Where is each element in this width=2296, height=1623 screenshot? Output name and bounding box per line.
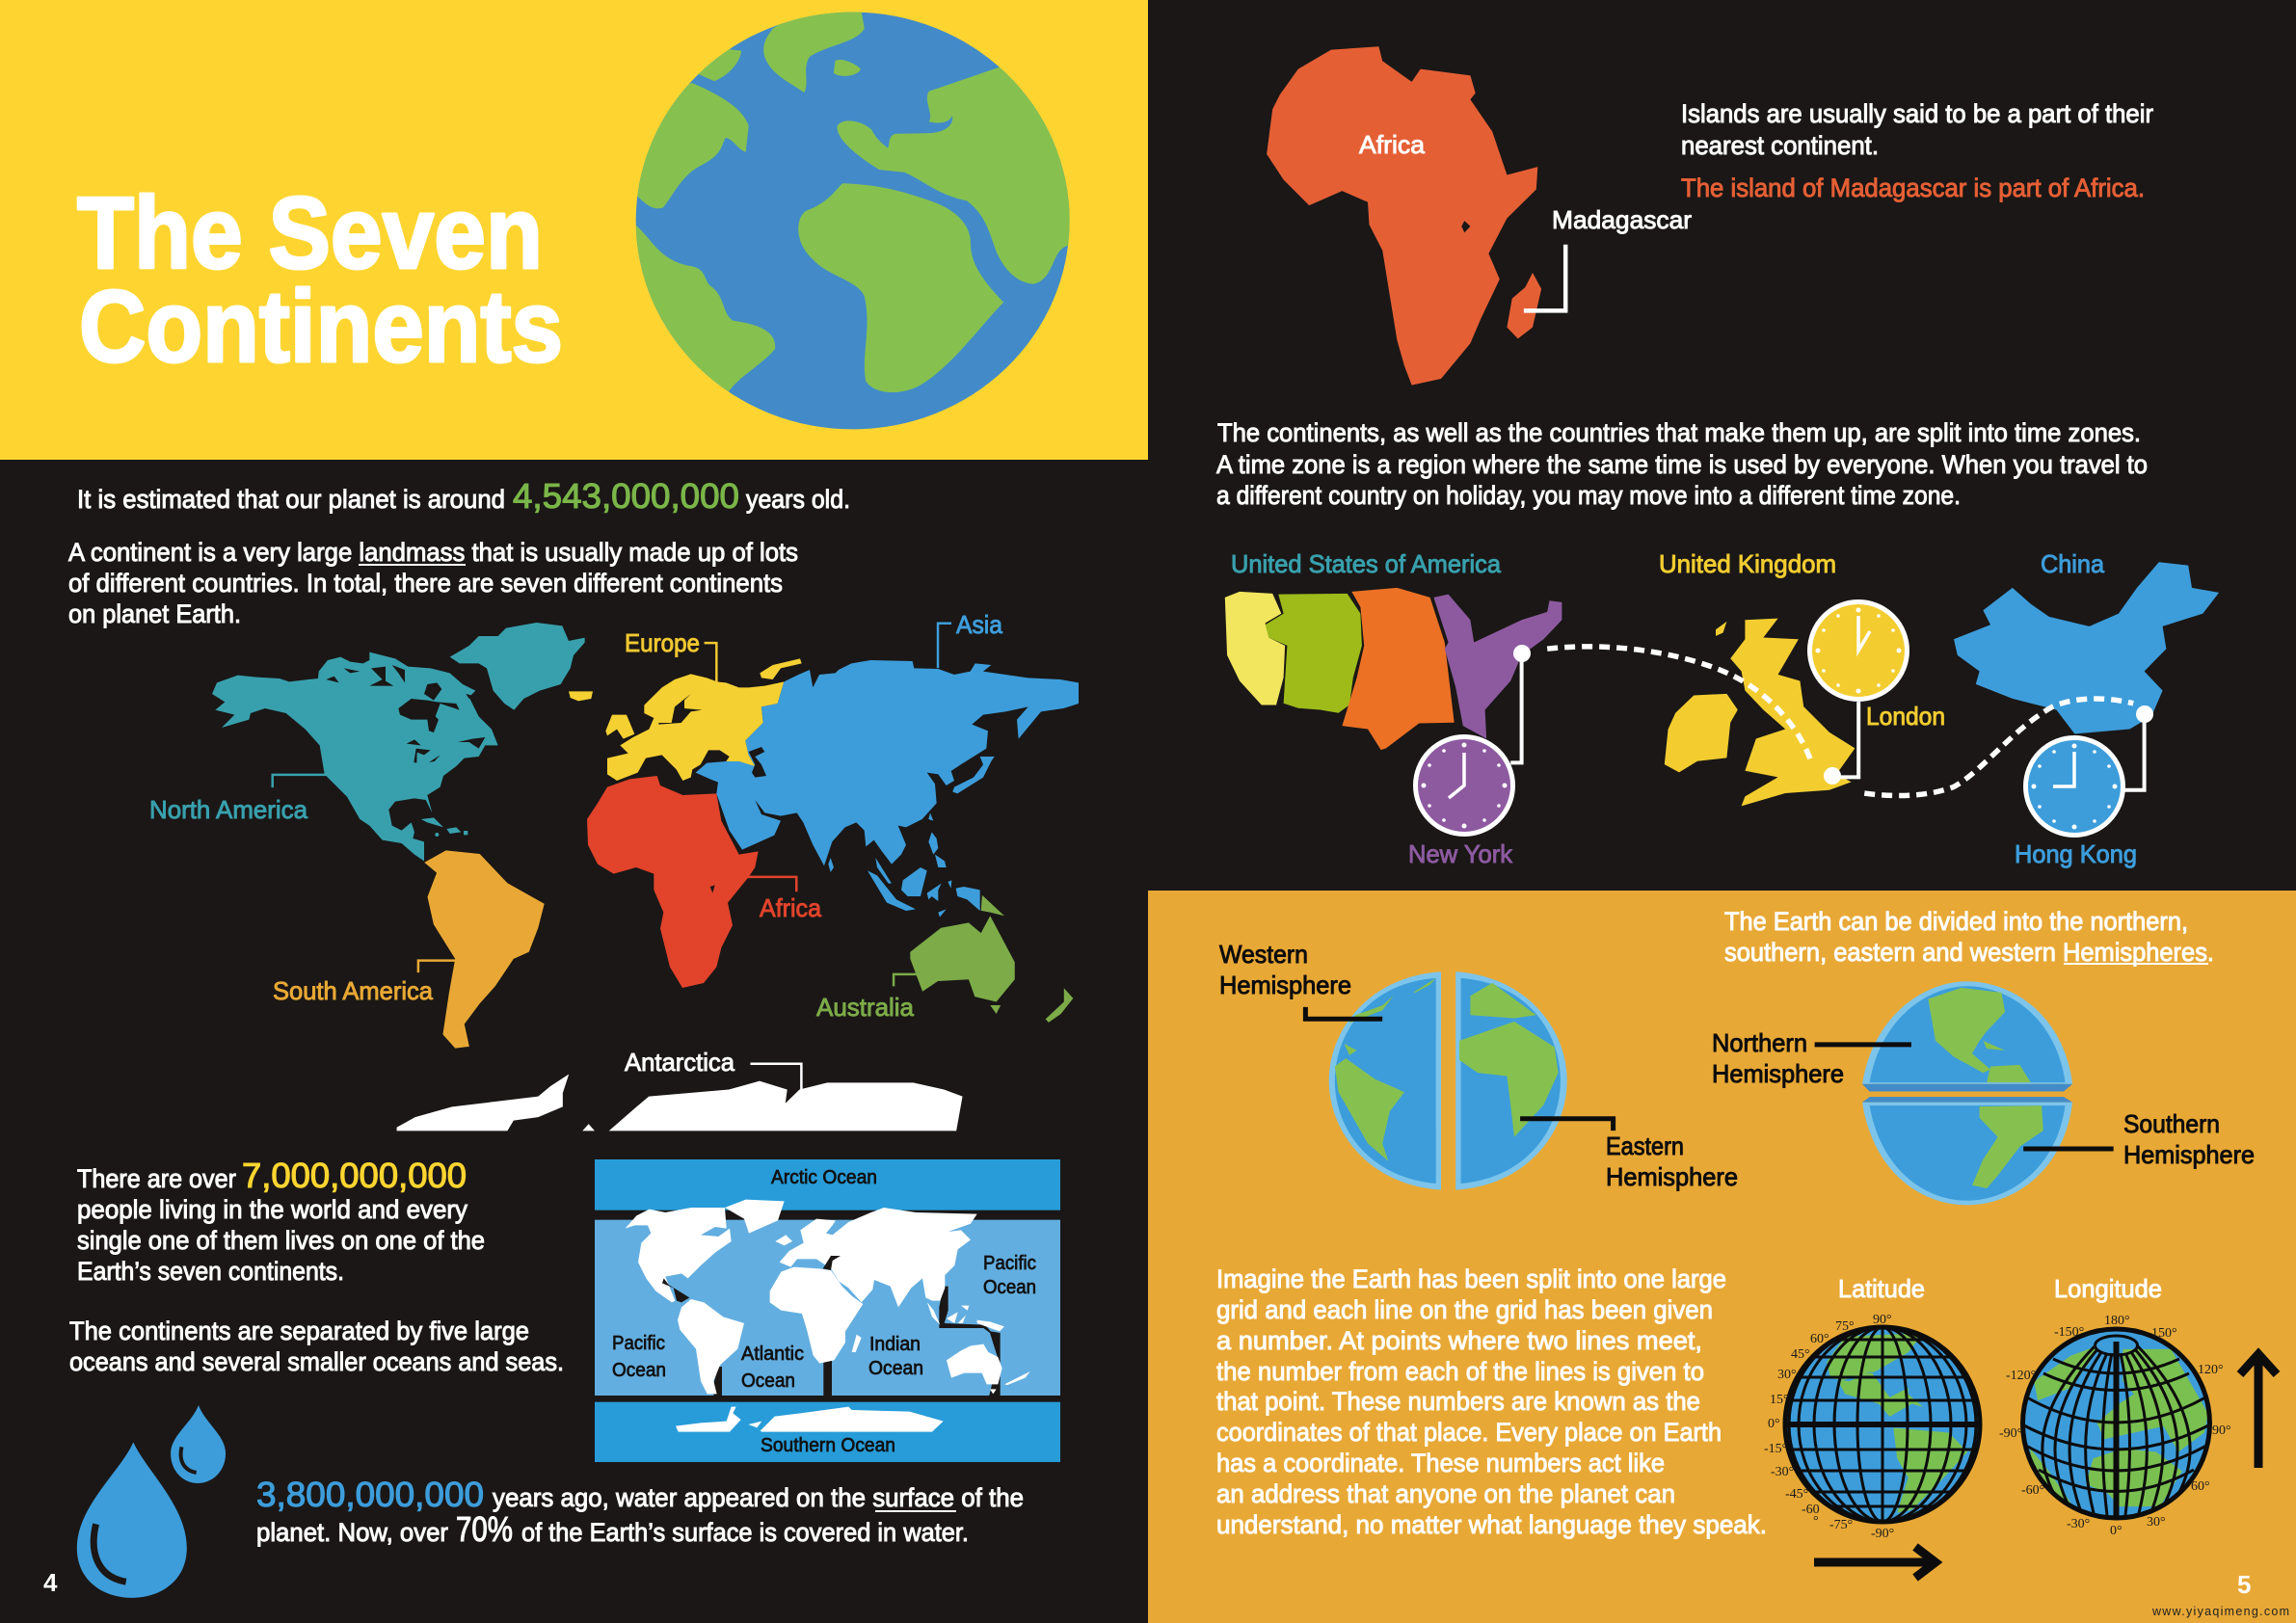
country and city labels: China: [2041, 549, 2105, 578]
latitude degree labels: -45°: [1785, 1487, 1808, 1502]
latitude degree labels: [1764, 1313, 1894, 1541]
continent: Asia: [696, 660, 1079, 918]
icon: earth globe: [623, 8, 1099, 429]
globe: eastern hemisphere: [1455, 971, 1567, 1190]
text: hemispheres intro: southern, eastern and western Hemispheres.: [1724, 938, 2214, 967]
longitude degree labels: 90°: [2212, 1423, 2231, 1438]
ocean labels: Arctic Ocean: [771, 1167, 877, 1188]
continent labels: Australia: [816, 993, 915, 1022]
clock leader lines: [1510, 653, 2145, 790]
globe: western hemisphere: [1329, 971, 1441, 1190]
text: coordinates paragraph: has a coordinate. These numbers act like: [1216, 1449, 1665, 1477]
longitude degree labels: 0°: [2110, 1524, 2122, 1538]
longitude degree labels: 180°: [2104, 1314, 2130, 1328]
globe: latitude: Latitude: [1838, 1274, 1925, 1303]
hemisphere labels: Western: [1219, 940, 1308, 969]
text: water facts: 70%: [456, 1509, 513, 1549]
latitude degree labels: 0°: [1768, 1417, 1780, 1431]
page number 5: 5: [2237, 1570, 2251, 1599]
text: coordinates paragraph: that point. These numbers are known as the: [1216, 1387, 1700, 1416]
ocean labels: Ocean: [612, 1360, 666, 1381]
text: coordinates paragraph: [1216, 1264, 1767, 1539]
hemisphere labels: Hemisphere: [2123, 1140, 2255, 1169]
text: water facts: of the Earth’s surface is covered in water.: [521, 1518, 969, 1547]
globe: northern hemisphere: [1862, 981, 2072, 1091]
text: coordinates paragraph: coordinates of that place. Every place on Earth: [1216, 1418, 1722, 1447]
globe: longitude: Longitude: [2054, 1274, 2162, 1303]
text: continent definition: [68, 538, 798, 628]
text: planet age: It is estimated that our planet is around: [77, 485, 505, 514]
labels: Africa, Madagascar: Madagascar: [1552, 205, 1692, 234]
clock: New York: [1415, 736, 1513, 835]
text: continent definition: A continent is a very large landmass that is usually made up of lots: [68, 538, 798, 567]
continent: Australia: [910, 895, 1073, 1023]
text: islands: The island of Madagascar is part of Africa.: [1681, 173, 2145, 202]
longitude degree labels: [1999, 1314, 2231, 1538]
leader lines: [273, 624, 951, 1093]
map shapes: [273, 624, 1073, 1131]
arrow: vertical: [2240, 1354, 2277, 1468]
ocean labels: Pacific: [983, 1253, 1036, 1274]
labels: Africa, Madagascar: [1359, 130, 1692, 234]
text: time zones: The continents, as well as the countries that make them up, are split into time zones.: [1217, 418, 2141, 447]
country and city labels: United Kingdom: [1659, 549, 1836, 578]
text: water facts: [256, 1475, 1024, 1549]
ocean labels: Atlantic: [741, 1344, 804, 1365]
globes: hemispheres: [1305, 971, 2114, 1205]
hemisphere labels: Eastern: [1606, 1131, 1684, 1160]
panel: left page intro text: [68, 476, 850, 628]
text: continent definition: of different countries. In total, there are seven different continents: [68, 569, 783, 598]
page number 4: 4: [43, 1568, 58, 1597]
text: time zones: [1216, 418, 2148, 510]
ocean labels: Ocean: [741, 1370, 795, 1392]
text: continent definition: on planet Earth.: [68, 599, 241, 628]
panel: orange hemispheres section: [1148, 891, 2296, 1623]
hemisphere labels: Hemisphere: [1219, 971, 1351, 999]
country and city labels: United States of America: [1231, 549, 1502, 578]
continent labels: North America: [149, 795, 308, 824]
latitude degree labels: 15°: [1770, 1393, 1789, 1407]
panel: Africa and Madagascar: [1267, 46, 2153, 386]
ocean labels: Ocean: [983, 1277, 1036, 1298]
clock: Hong Kong: [2026, 738, 2122, 835]
panel: ocean map: [595, 1159, 1060, 1462]
longitude degree labels: 120°: [2198, 1363, 2224, 1377]
hemisphere leader lines: [1305, 1007, 2114, 1149]
flight path dashed: [1547, 647, 2133, 796]
arrow: horizontal: [1814, 1547, 1936, 1578]
latitude degree labels: 45°: [1791, 1347, 1810, 1362]
text: planet age: 4,543,000,000: [513, 476, 739, 516]
country and city labels: [1231, 549, 2137, 868]
text: water facts: years ago, water appeared on the surface of the: [493, 1483, 1024, 1512]
ocean map land: [595, 1159, 1060, 1462]
text: water facts: planet. Now, over: [256, 1518, 448, 1547]
map: USA time zones: [1225, 588, 1562, 750]
continent: Africa: [587, 776, 759, 988]
longitude degree labels: 60°: [2191, 1479, 2210, 1494]
text: population: 7,000,000,000: [242, 1156, 467, 1195]
text: population: There are over: [77, 1164, 236, 1193]
latitude degree labels: °: [1813, 1514, 1819, 1529]
globe: latitude: [1764, 1274, 1982, 1541]
text: water facts: 3,800,000,000: [256, 1475, 484, 1514]
continent labels: South America: [273, 976, 434, 1005]
continent: Europe, Iceland: [569, 658, 802, 781]
panel: yellow title banner: [0, 0, 1148, 460]
hemisphere labels: [1219, 940, 2255, 1191]
ocean labels: Southern Ocean: [761, 1435, 895, 1456]
text: planet age: [77, 476, 850, 516]
panel: world map of continents: [149, 610, 1079, 1131]
longitude degree labels: 150°: [2151, 1326, 2177, 1341]
text: time zones: a different country on holiday, you may move into a different time zone.: [1216, 481, 1961, 510]
latitude degree labels: 90°: [1873, 1313, 1892, 1327]
text: oceans: oceans and several smaller oceans and seas.: [69, 1347, 564, 1376]
globe: longitude: [1999, 1274, 2231, 1538]
hemisphere labels: Southern: [2123, 1109, 2220, 1138]
hemisphere labels: Hemisphere: [1606, 1162, 1738, 1191]
text: oceans: The continents are separated by five large: [69, 1317, 529, 1345]
text: coordinates paragraph: a number. At points where two lines meet,: [1216, 1326, 1702, 1355]
title: The Seven: [77, 176, 543, 290]
map: China: [1954, 562, 2219, 733]
text: coordinates paragraph: Imagine the Earth has been split into one large: [1216, 1264, 1726, 1293]
title: Continents: [79, 270, 563, 384]
longitude degree labels: -120°: [2006, 1369, 2036, 1383]
text: islands: [1681, 99, 2153, 202]
text: population: [77, 1156, 485, 1286]
continent labels: Asia: [956, 610, 1003, 639]
text: coordinates paragraph: grid and each line on the grid has been given: [1216, 1295, 1713, 1324]
panel: time zone maps: [1225, 549, 2219, 868]
text: hemispheres intro: [1724, 907, 2214, 967]
latitude degree labels: 60°: [1810, 1332, 1829, 1346]
ocean labels: Ocean: [868, 1358, 923, 1379]
text: planet age: years old.: [746, 485, 850, 514]
continent: North America: [212, 623, 585, 861]
longitude degree labels: -90°: [1999, 1426, 2022, 1441]
icon: water drops: [77, 1405, 226, 1598]
ocean labels: [612, 1167, 1036, 1456]
continent labels: Africa: [760, 893, 822, 922]
map: Africa: [1267, 46, 1565, 386]
hemisphere labels: Hemisphere: [1712, 1059, 1844, 1088]
text: population: Earth’s seven continents.: [77, 1257, 344, 1286]
ocean labels: Pacific: [612, 1333, 665, 1354]
continent labels: [149, 610, 1003, 1077]
title: [77, 176, 563, 384]
longitude degree labels: -60°: [2021, 1483, 2044, 1498]
latitude degree labels: 30°: [1777, 1368, 1797, 1382]
text: coordinates paragraph: understand, no matter what language they speak.: [1216, 1510, 1767, 1539]
text: population: people living in the world and every: [77, 1195, 467, 1224]
country and city labels: London: [1866, 702, 1945, 731]
country and city labels: Hong Kong: [2015, 839, 2137, 868]
text: time zones: A time zone is a region where the same time is used by everyone. When you travel to: [1216, 450, 2148, 479]
continent: Antarctica: [397, 1074, 963, 1131]
country and city labels: New York: [1408, 839, 1513, 868]
clock: London: [1810, 601, 1907, 700]
latitude degree labels: -75°: [1829, 1518, 1853, 1532]
text: coordinates paragraph: the number from each of the lines is given to: [1216, 1357, 1704, 1386]
continent: South America: [424, 850, 545, 1049]
text: islands: Islands are usually said to be a part of their: [1681, 99, 2153, 128]
text: coordinates paragraph: an address that anyone on the planet can: [1216, 1479, 1675, 1508]
text: population: single one of them lives on one of the: [77, 1226, 485, 1255]
maps: USA, UK, China: [1225, 562, 2219, 806]
latitude degree labels: -30°: [1771, 1465, 1794, 1479]
globe: southern hemisphere: [1862, 1097, 2072, 1205]
continent labels: Europe: [625, 628, 700, 657]
longitude degree labels: -30°: [2067, 1517, 2090, 1531]
map: UK: [1665, 619, 1855, 806]
website credit: www.yiyaqimeng.com: [2151, 1605, 2289, 1618]
latitude degree labels: 75°: [1835, 1319, 1855, 1334]
longitude degree labels: 30°: [2147, 1515, 2166, 1530]
longitude degree labels: -150°: [2054, 1325, 2084, 1340]
latitude degree labels: -15°: [1764, 1442, 1787, 1456]
hemisphere labels: Northern: [1712, 1028, 1807, 1057]
labels: Africa, Madagascar: Africa: [1359, 130, 1426, 159]
text: islands: nearest continent.: [1681, 131, 1879, 160]
latitude degree labels: -90°: [1871, 1527, 1894, 1541]
continent labels: Antarctica: [625, 1048, 735, 1077]
text: oceans: [69, 1317, 564, 1376]
text: hemispheres intro: The Earth can be divided into the northern,: [1724, 907, 2188, 936]
location dots: [1513, 645, 2153, 785]
ocean labels: Indian: [869, 1334, 921, 1355]
latitude degree labels: -60: [1802, 1503, 1820, 1517]
